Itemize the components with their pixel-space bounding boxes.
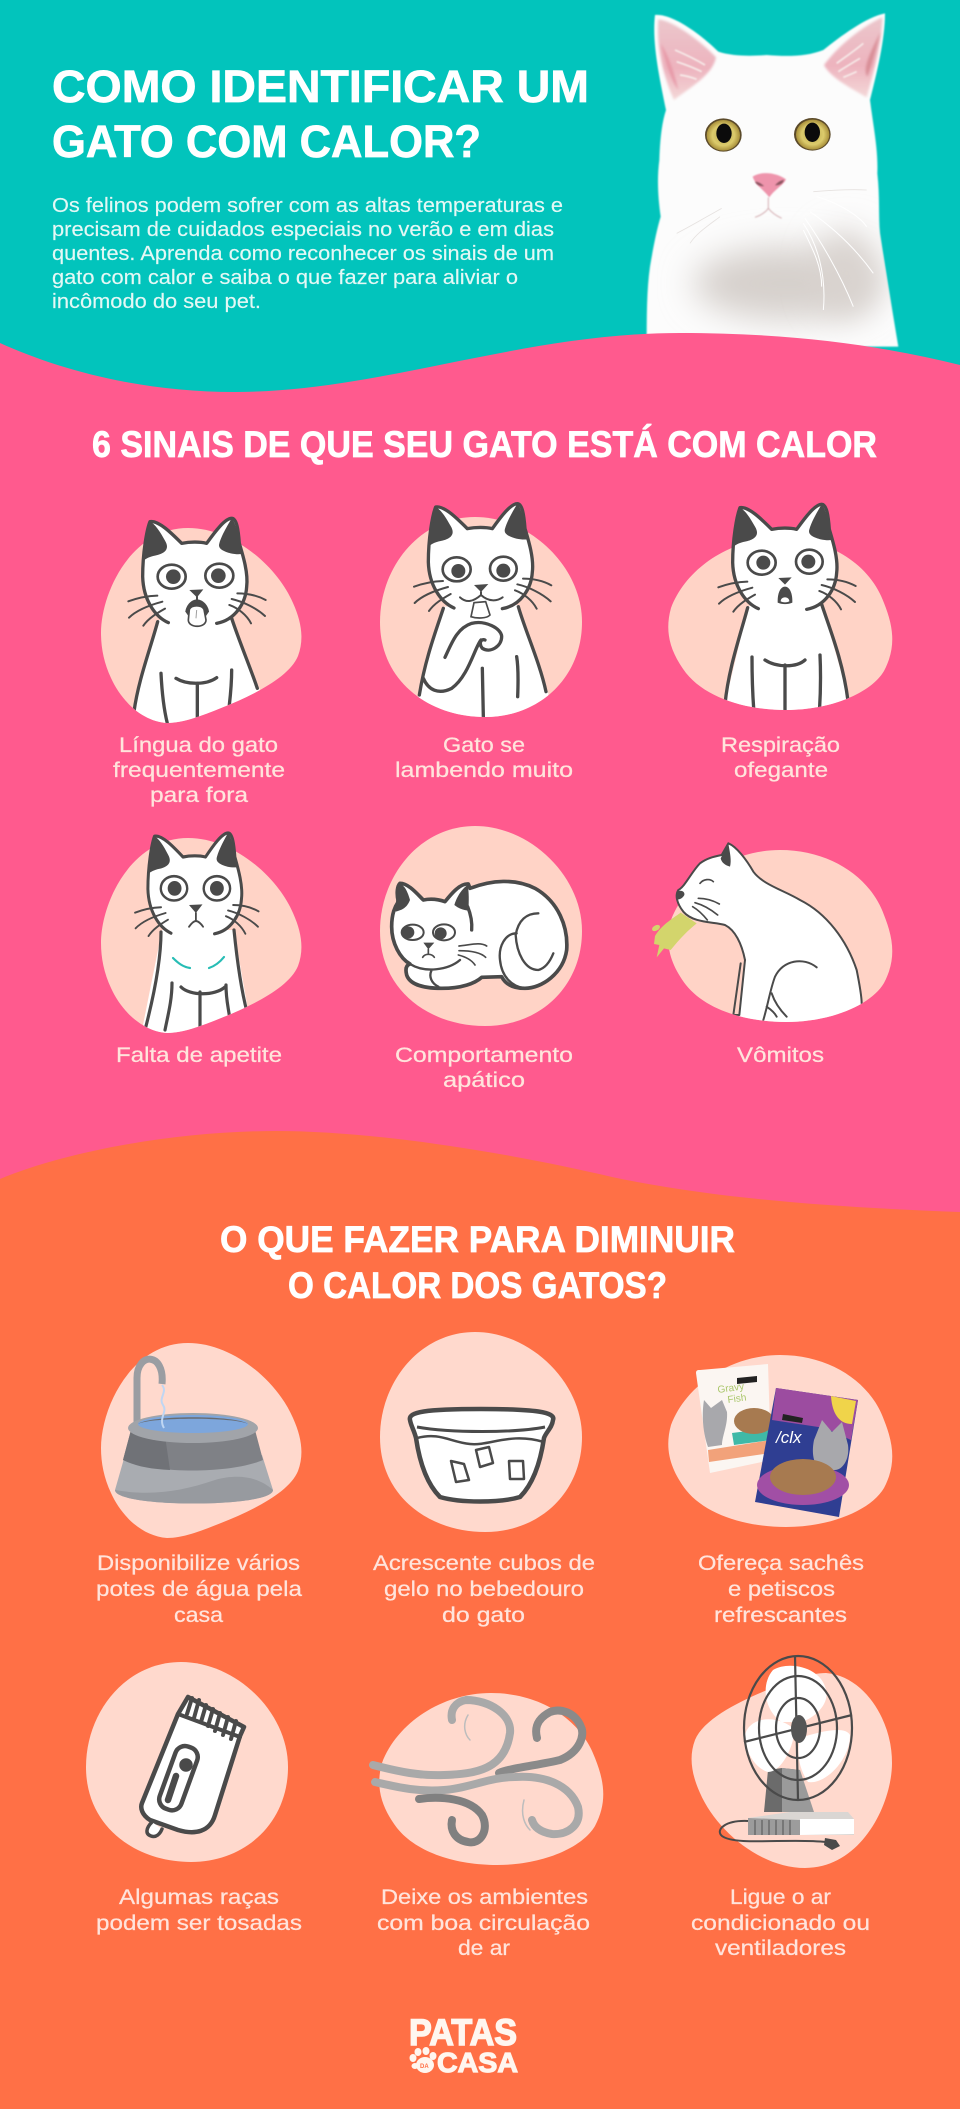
blob	[101, 838, 301, 1033]
tip 4: clipper	[86, 1662, 302, 1935]
label	[377, 1886, 590, 1960]
icon: blue sachet: /clx	[775, 1428, 802, 1447]
sign 5: apathetic behaviour	[380, 826, 582, 1092]
heading: what to do	[220, 1219, 735, 1306]
intro text: quentes. Aprenda como reconhecer os sinais de um	[52, 243, 554, 265]
sign 2: licking	[380, 504, 582, 782]
blob	[380, 517, 582, 717]
teal header background	[0, 0, 960, 420]
tip 2: ice cubes	[373, 1332, 595, 1627]
label: Ofereça sachês	[698, 1552, 864, 1575]
blob	[86, 1662, 288, 1862]
thin cat	[135, 833, 259, 1040]
label: Acrescente cubos de	[373, 1552, 595, 1575]
title	[52, 61, 589, 167]
intro text: precisam de cuidados especiais no verão e em dias	[52, 219, 554, 241]
intro text	[52, 195, 563, 313]
pink section background wave	[0, 333, 960, 1300]
icon: water fountain	[115, 1359, 273, 1504]
sign 1: tongue out	[101, 518, 301, 807]
label: casa	[174, 1604, 223, 1627]
label: com boa circulação	[377, 1912, 590, 1935]
blob	[668, 538, 892, 710]
heading: what to do: O QUE FAZER PARA DIMINUIR	[220, 1219, 735, 1260]
label: Língua do gato	[119, 734, 278, 757]
sign 3: panting	[668, 504, 892, 782]
tip 3: sachets	[668, 1355, 892, 1627]
blob	[380, 1332, 582, 1532]
label: e petiscos	[728, 1578, 835, 1601]
icon: white sachet: Fish	[727, 1392, 747, 1406]
blob	[380, 826, 582, 1026]
sign 6: vomiting	[651, 843, 892, 1067]
label: frequentemente	[113, 759, 285, 782]
orange section background wave	[0, 1131, 960, 2109]
blob	[379, 1693, 603, 1865]
label: Vômitos	[737, 1044, 824, 1067]
label	[113, 734, 285, 807]
icon: fan	[720, 1656, 854, 1850]
intro text: incômodo do seu pet.	[52, 291, 261, 313]
icon: bowl with ice	[410, 1409, 553, 1502]
label: refrescantes	[714, 1604, 847, 1627]
label: lambendo muito	[395, 759, 573, 782]
label: Deixe os ambientes	[381, 1886, 588, 1909]
logo: Patas da Casa: PATAS	[409, 2012, 517, 2053]
label	[395, 734, 573, 782]
label	[691, 1886, 870, 1960]
tip 5: air circulation	[373, 1693, 603, 1960]
label: Algumas raças	[119, 1886, 279, 1909]
blob	[668, 1355, 892, 1527]
blob	[692, 1673, 892, 1868]
label	[395, 1044, 573, 1092]
sign 4: lack of appetite	[101, 833, 301, 1067]
label: apático	[443, 1069, 525, 1092]
label: Falta de apetite	[116, 1044, 282, 1067]
heading: what to do: O CALOR DOS GATOS?	[288, 1265, 667, 1306]
label: gelo no bebedouro	[384, 1578, 584, 1601]
label: Ligue o ar	[730, 1886, 831, 1909]
cat vomiting	[677, 843, 863, 1043]
label: Gato se	[443, 734, 525, 757]
icon: white sachet	[696, 1364, 774, 1473]
label	[373, 1552, 595, 1627]
icon: blue sachet	[755, 1388, 858, 1517]
tip 1: water bowls	[96, 1343, 302, 1627]
icon: white sachet: Gravy	[717, 1381, 745, 1396]
label: potes de água pela	[96, 1578, 302, 1601]
loaf cat	[392, 881, 567, 988]
tip 6: fan	[691, 1656, 892, 1960]
logo: Patas da Casa	[409, 2012, 518, 2078]
intro text: Os felinos podem sofrer com as altas temperaturas e	[52, 195, 563, 217]
label: podem ser tosadas	[96, 1912, 302, 1935]
intro text: gato com calor e saiba o que fazer para aliviar o	[52, 267, 518, 289]
heading: six signs: 6 SINAIS DE QUE SEU GATO ESTÁ COM CALOR	[92, 424, 877, 465]
label: Disponibilize vários	[97, 1552, 300, 1575]
cat sticking tongue out	[128, 518, 266, 743]
label: ofegante	[734, 759, 828, 782]
blob	[101, 528, 301, 723]
logo: Patas da Casa: CASA	[437, 2047, 518, 2078]
blob	[101, 1343, 301, 1538]
label: para fora	[150, 784, 248, 807]
vomit splash	[651, 913, 697, 957]
title: COMO IDENTIFICAR UM	[52, 61, 589, 112]
icon: wind swirls	[373, 1700, 582, 1842]
icon: paw: DA	[420, 2064, 429, 2070]
label: Comportamento	[395, 1044, 573, 1067]
label	[96, 1886, 302, 1935]
title: GATO COM CALOR?	[52, 116, 481, 167]
cat panting	[718, 504, 856, 736]
teal rib marks	[173, 957, 224, 968]
label: Respiração	[721, 734, 840, 757]
cat licking paw	[414, 504, 551, 733]
label: ventiladores	[715, 1937, 846, 1960]
label: do gato	[442, 1604, 525, 1627]
label	[96, 1552, 302, 1627]
label	[721, 734, 840, 782]
label	[698, 1552, 864, 1627]
label: condicionado ou	[691, 1912, 870, 1935]
blob	[668, 850, 892, 1022]
icon: hair clipper	[141, 1697, 244, 1837]
label: de ar	[458, 1937, 510, 1960]
photo: white cat	[647, 13, 898, 347]
